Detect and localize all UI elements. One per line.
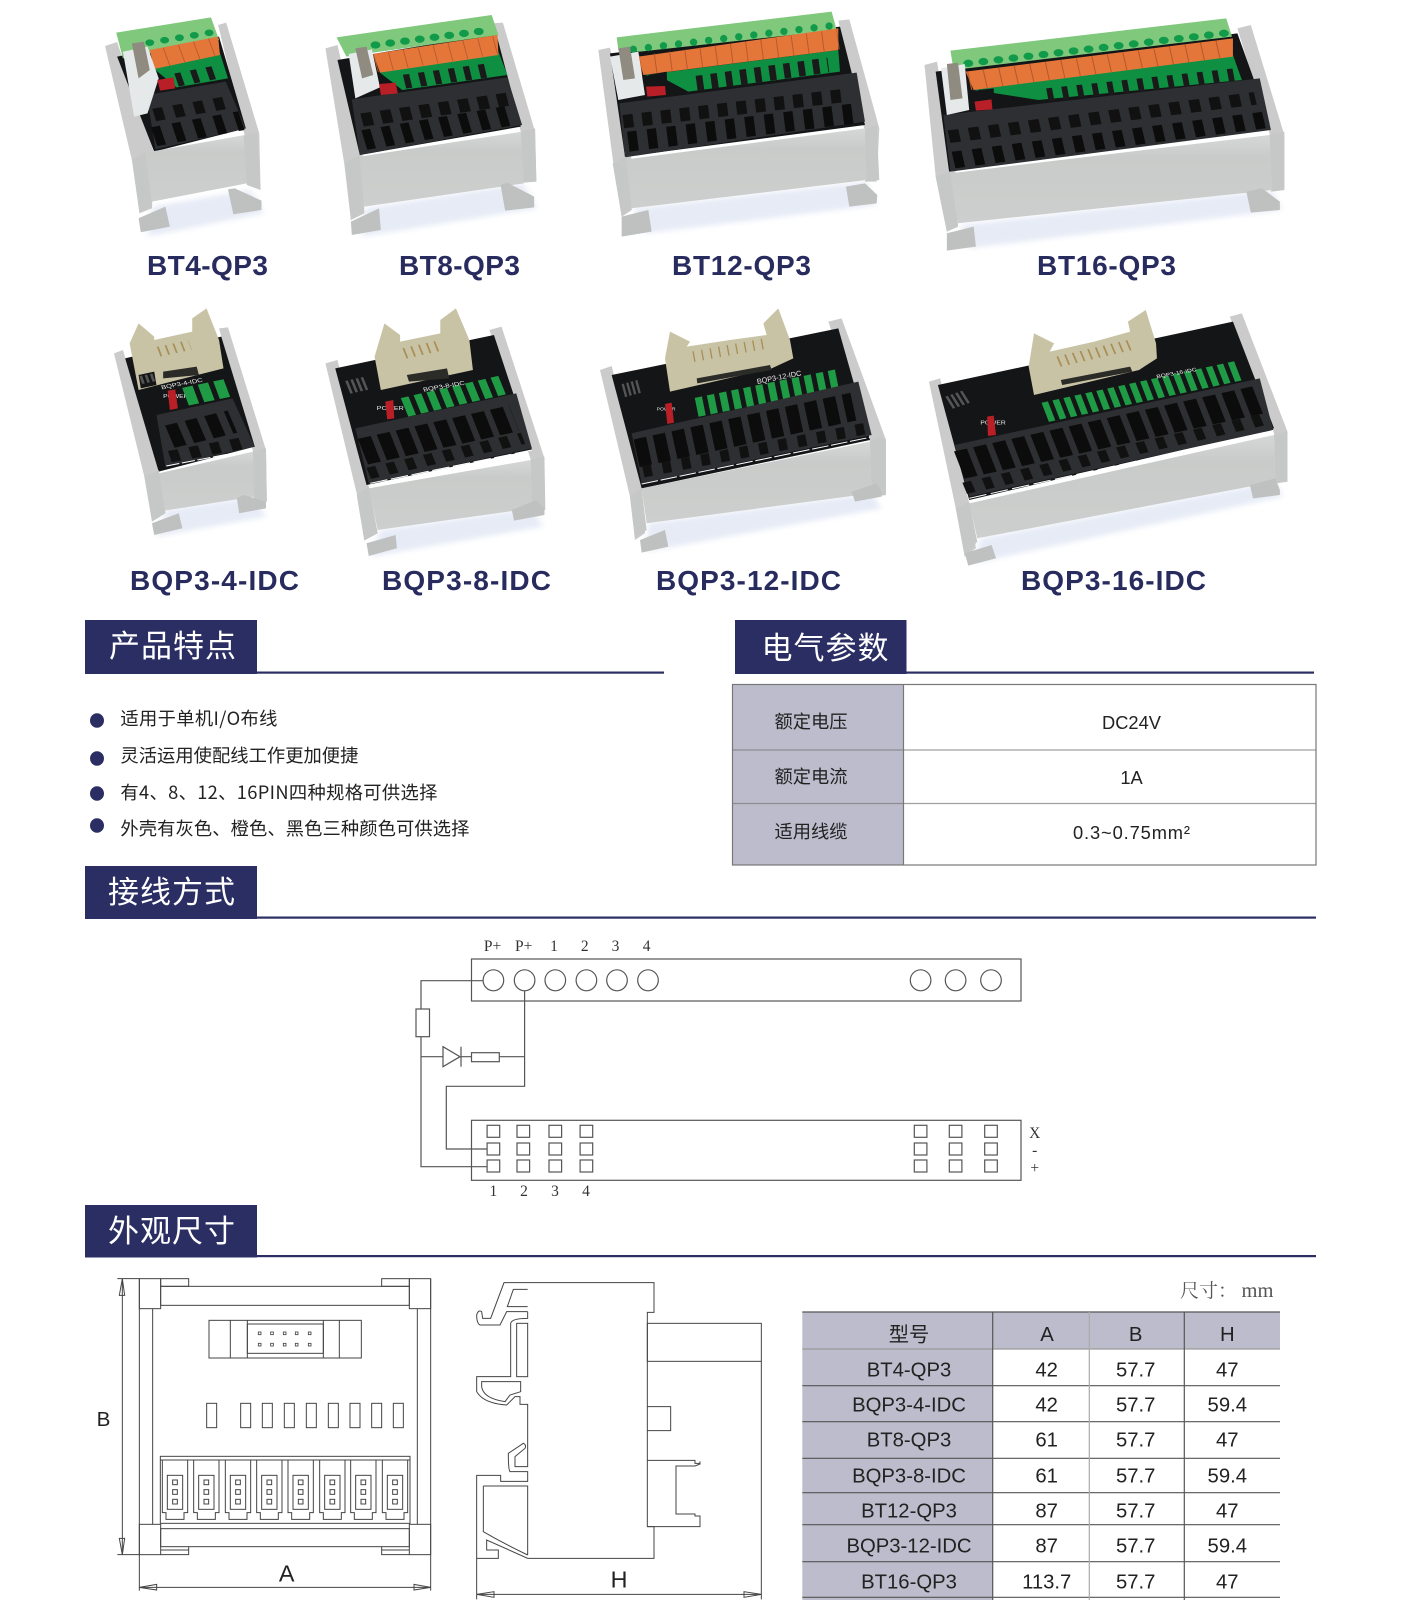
panel: product features — [85, 620, 664, 841]
dimension table: 57.7 — [1116, 1360, 1155, 1382]
name: BT12-QP3: BT12-QP3 — [672, 250, 811, 281]
dimension table: 47 — [1216, 1571, 1239, 1593]
I/O strip — [472, 1120, 1040, 1200]
unit note: mm — [1242, 1280, 1273, 1302]
I/O strip: 2 — [520, 1183, 528, 1200]
dimension table: BT4-QP3 — [867, 1360, 951, 1382]
heading: electrical parameters — [735, 620, 1314, 674]
dimension table: 61 — [1035, 1430, 1058, 1452]
panel: outline dimensions — [85, 1205, 1316, 1600]
I/O strip: X — [1029, 1125, 1040, 1142]
I/O strip: + — [1030, 1160, 1039, 1177]
dimension table: 57.7 — [1116, 1465, 1155, 1487]
heading: outline dimensions: 外观尺寸 — [108, 1206, 235, 1251]
heading: electrical parameters: 电气参数 — [762, 623, 888, 668]
dimension table — [802, 1312, 1280, 1600]
I/O strip: - — [1032, 1142, 1037, 1159]
terminal strip: 2 — [581, 938, 589, 955]
drawing: side view with H dimension: H — [611, 1566, 627, 1592]
dimension table: 87 — [1035, 1501, 1058, 1523]
dimension table: BT8-QP3 — [867, 1430, 951, 1452]
dimension table: BT16-QP3 — [861, 1571, 957, 1593]
heading: outline dimensions — [85, 1205, 1316, 1258]
dimension table: 47 — [1216, 1360, 1239, 1382]
name: BT4-QP3: BT4-QP3 — [147, 250, 268, 281]
photo: BQP3-8-IDC module: BQP3-8-IDC — [422, 380, 466, 393]
photo: BQP3-16-IDC module: POWER — [980, 421, 1006, 426]
dimension table: H — [1220, 1324, 1235, 1346]
photo: BT16-QP3 module — [924, 18, 1284, 251]
product photos: QP3 series — [105, 12, 1284, 251]
wires, resistors and diode — [416, 981, 525, 1167]
panel: electrical parameters — [732, 620, 1316, 865]
dimension table: 59.4 — [1208, 1536, 1247, 1558]
dimension table: 47 — [1216, 1430, 1239, 1452]
parameter table: 1A — [1120, 767, 1143, 788]
photo: BQP3-12-IDC module: BQP3-12-IDC — [756, 368, 803, 386]
photo: BQP3-8-IDC module — [325, 308, 545, 557]
product names: QP3 series — [147, 250, 1176, 281]
dimension table: 59.4 — [1208, 1465, 1247, 1487]
dimension table: BQP3-8-IDC — [852, 1465, 966, 1487]
feature list: 外壳有灰色、橙色、黑色三种颜色可供选择 — [120, 815, 469, 841]
panel: wiring method — [85, 866, 1316, 1200]
feature list: 适用于单机I/O布线 — [120, 705, 277, 731]
drawing: side view with H dimension — [477, 1283, 761, 1599]
terminal strip: 1 — [550, 938, 558, 955]
dimension table: 42 — [1035, 1395, 1058, 1417]
terminal strip: 3 — [612, 938, 620, 955]
dimension table: 57.7 — [1116, 1536, 1155, 1558]
product photos: IDC series — [114, 308, 1287, 566]
dimension table: 型号 — [889, 1318, 929, 1348]
dimension table: 57.7 — [1116, 1395, 1155, 1417]
photo: BQP3-4-IDC module — [114, 308, 267, 537]
drawing: top view with A and B dimensions — [97, 1279, 431, 1591]
I/O strip: 1 — [490, 1183, 497, 1200]
parameter table: 0.3~0.75mm² — [1073, 822, 1190, 843]
feature list — [90, 705, 469, 841]
dimension table: 61 — [1035, 1465, 1058, 1487]
dimension table: 87 — [1035, 1536, 1058, 1558]
dimension table: BT12-QP3 — [861, 1501, 957, 1523]
dimension table: 59.4 — [1208, 1395, 1247, 1417]
photo: BT12-QP3 module — [598, 12, 879, 237]
photo: BT8-QP3 module — [325, 15, 536, 237]
photo: BQP3-12-IDC module: POWER — [657, 407, 676, 413]
drawing: top view with A and B dimensions: A — [279, 1561, 295, 1587]
feature list: 有4、8、12、16PIN四种规格可供选择 — [120, 779, 437, 805]
photo: BQP3-16-IDC module — [929, 310, 1287, 566]
terminal strip: P+ — [484, 938, 501, 955]
feature list: 灵活运用使配线工作更加便捷 — [120, 742, 358, 768]
name: BQP3-16-IDC: BQP3-16-IDC — [1021, 565, 1206, 596]
heading: wiring method: 接线方式 — [108, 867, 235, 912]
name: BQP3-8-IDC: BQP3-8-IDC — [382, 565, 551, 596]
parameter table: 额定电流 — [774, 763, 848, 789]
I/O strip: 3 — [551, 1183, 559, 1200]
dimension table: BQP3-4-IDC — [852, 1395, 966, 1417]
dimension table: 47 — [1216, 1501, 1239, 1523]
dimension table: A — [1040, 1324, 1054, 1346]
photo: BQP3-8-IDC module: POWER — [377, 406, 404, 412]
parameter table: 适用线缆 — [774, 818, 848, 844]
terminal strip — [472, 938, 1021, 1001]
heading: product features — [85, 620, 664, 674]
unit note: 尺寸： — [1180, 1281, 1237, 1302]
parameter table — [732, 684, 1316, 865]
parameter table: DC24V — [1102, 712, 1162, 733]
heading: wiring method — [85, 866, 1316, 919]
photo: BT4-QP3 module — [105, 17, 264, 237]
dimension table: 57.7 — [1116, 1430, 1155, 1452]
terminal strip: P+ — [515, 938, 532, 955]
product names: IDC series — [130, 565, 1206, 596]
name: BT8-QP3: BT8-QP3 — [399, 250, 520, 281]
dimension table: 42 — [1035, 1360, 1058, 1382]
dimension table: 57.7 — [1116, 1501, 1155, 1523]
photo: BQP3-4-IDC module: BQP3-4-IDC — [160, 378, 204, 391]
dimension table: BQP3-12-IDC — [846, 1536, 972, 1558]
name: BT16-QP3: BT16-QP3 — [1037, 250, 1176, 281]
heading: product features: 产品特点 — [109, 621, 236, 666]
wiring diagram — [416, 938, 1040, 1200]
I/O strip: 4 — [582, 1183, 590, 1200]
dimension table: 57.7 — [1116, 1571, 1155, 1593]
drawing: top view with A and B dimensions: B — [97, 1408, 110, 1431]
parameter table: 额定电压 — [774, 708, 848, 734]
name: BQP3-4-IDC: BQP3-4-IDC — [130, 565, 299, 596]
photo: BQP3-12-IDC module — [600, 308, 886, 553]
dimension table: B — [1129, 1324, 1142, 1346]
name: BQP3-12-IDC: BQP3-12-IDC — [656, 565, 841, 596]
dimension table: 113.7 — [1022, 1571, 1071, 1593]
photo: BQP3-16-IDC module: BQP3-16-IDC — [1156, 367, 1198, 380]
photo: BQP3-4-IDC module: POWER — [163, 395, 188, 400]
terminal strip: 4 — [643, 938, 651, 955]
